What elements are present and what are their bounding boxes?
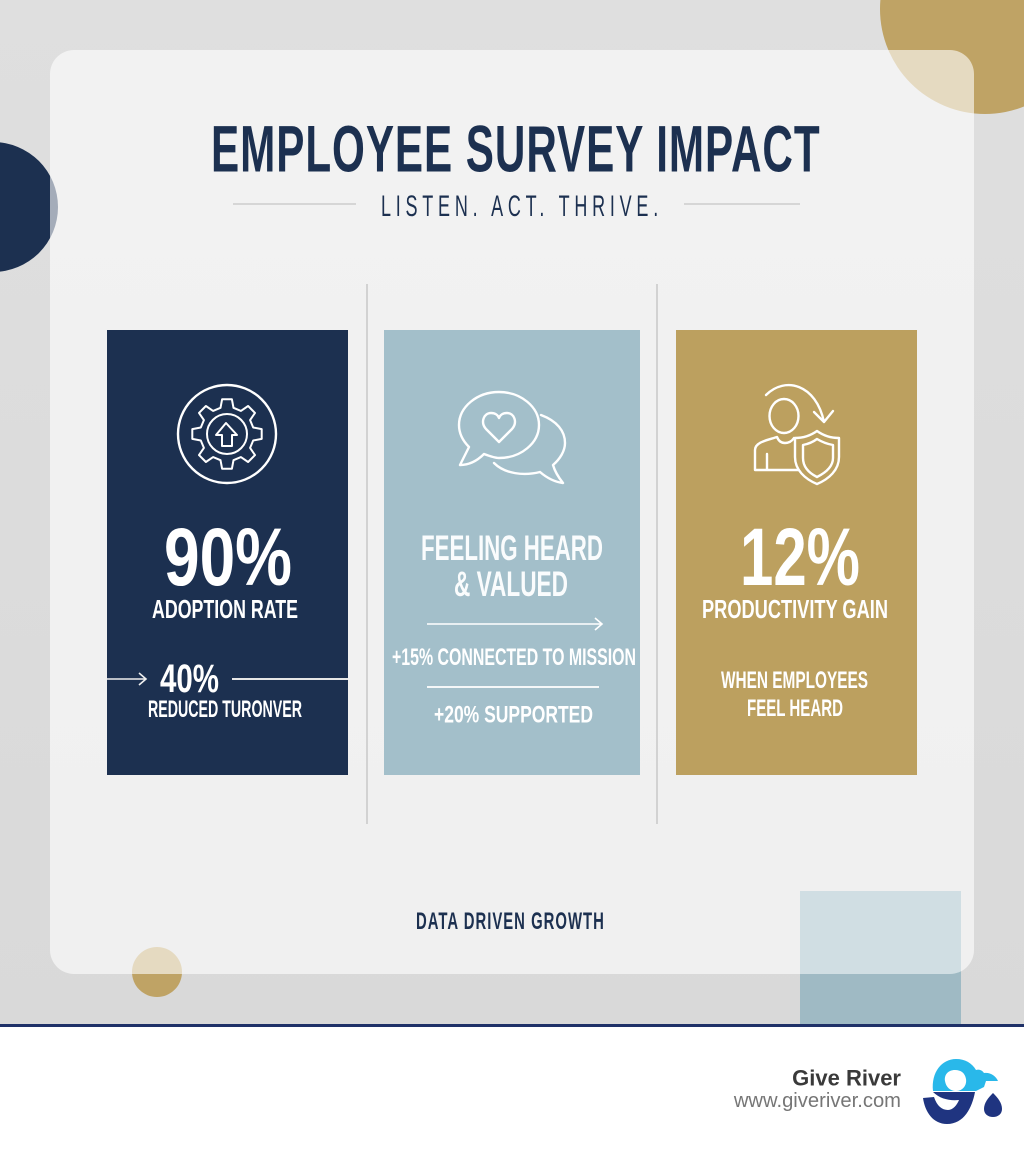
stat: 40%: 40% [160, 657, 219, 701]
decorative gold circle bottom left [132, 947, 182, 997]
website: www.giveriver.com [733, 1090, 901, 1112]
brand name: Give River [792, 1066, 901, 1090]
note: when employees: WHEN EMPLOYEES [721, 667, 868, 694]
label: adoption rate: ADOPTION RATE [152, 594, 298, 624]
arrow [107, 673, 146, 685]
title: EMPLOYEE SURVEY IMPACT [211, 112, 820, 186]
arrow [427, 618, 602, 630]
subtitle: LISTEN. ACT. THRIVE. [381, 191, 658, 223]
icon: gear with up arrow [178, 385, 276, 483]
stat: 90%: 90% [164, 512, 292, 603]
decorative blue square bottom right [800, 891, 961, 1025]
heading: feeling heard: FEELING HEARD [421, 529, 603, 568]
caption: DATA DRIVEN GROWTH [416, 909, 604, 935]
decorative navy circle left [0, 142, 58, 272]
icon: person with shield [755, 385, 839, 484]
label: productivity gain: PRODUCTIVITY GAIN [702, 594, 888, 624]
panel: feeling heard [384, 330, 640, 775]
icon: chat bubbles with heart [459, 392, 565, 483]
decorative gold circle top right [880, 0, 1024, 114]
translucent main panel [50, 50, 974, 974]
connector line [232, 678, 348, 680]
stat: 12%: 12% [740, 512, 860, 603]
note: feel heard: FEEL HEARD [747, 695, 843, 722]
panel: adoption [107, 330, 348, 775]
stat: connected to mission: +15% CONNECTED TO MISSION [392, 644, 636, 671]
label: reduced turnover: REDUCED TURONVER [148, 696, 302, 723]
logo [923, 1059, 1002, 1124]
footer [0, 1024, 1024, 1154]
stat: supported: +20% SUPPORTED [434, 702, 593, 728]
heading: and valued: & VALUED [454, 565, 568, 604]
panel: productivity [676, 330, 917, 775]
